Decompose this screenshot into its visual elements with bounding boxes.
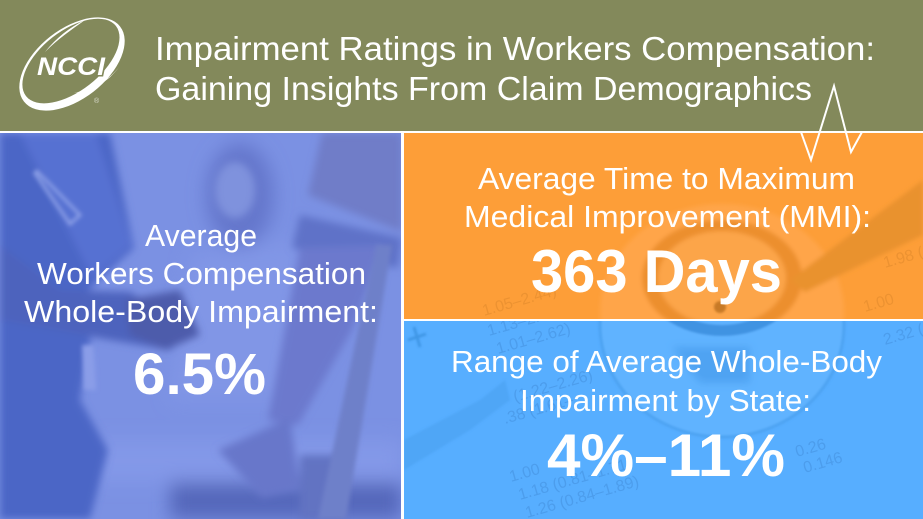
photo: stethoscope and data table, blue tint: 1.13–2.76): [485, 302, 564, 340]
heading: average time to maximum medical improvement: Medical Improvement (MMI):: [464, 199, 871, 234]
heading: average whole-body impairment: Workers Compensation: [37, 256, 366, 291]
photo: stethoscope and data table, orange tint: 1.00: [861, 291, 896, 316]
heading: average whole-body impairment: Whole-Body Impairment:: [24, 294, 378, 329]
photo: stethoscope and data table, orange tint: 1.05–2.44): [480, 282, 559, 320]
photo: stethoscope and data table, blue tint: 1.18 (0.81–1.71): [516, 455, 634, 504]
stat: 4%–11%: 4%–11%: [547, 422, 785, 489]
photo: stethoscope and data table, orange tint: [404, 133, 923, 319]
heading: range of average whole-body impairment by state: Range of Average Whole-Body: [451, 344, 882, 379]
stat: 363 Days: 363 Days: [531, 238, 782, 305]
heading: average whole-body impairment: Average: [145, 218, 257, 253]
photo: stethoscope and data table, blue tint: 0.146: [801, 449, 845, 477]
photo: stethoscope and data table, blue tint: [404, 321, 923, 519]
heading: average time to maximum medical improvement: [464, 161, 871, 234]
icon: NCCI logo: NCCI: [37, 53, 106, 81]
panel: average time to MMI: [404, 133, 923, 319]
heading: average whole-body impairment: [24, 218, 378, 329]
title: Impairment Ratings in Workers Compensation:: [155, 30, 875, 67]
panel: range by state: [404, 321, 923, 519]
panel: header band: [0, 0, 923, 131]
panel: workers compensation whole-body impairment: [0, 133, 402, 519]
photo: nurse and patient on crutches, blue tint: [0, 133, 402, 519]
heading: range of average whole-body impairment by state: Impairment by State:: [520, 383, 811, 418]
icon: NCCI logo: [2, 0, 142, 129]
heading: average time to maximum medical improvement: Average Time to Maximum: [478, 161, 855, 196]
photo: stethoscope and data table, blue tint: (1.22–2.26): [511, 367, 595, 406]
title: [155, 30, 875, 107]
photo: stethoscope and data table, blue tint: 0.26: [793, 436, 828, 461]
photo: stethoscope and data table, blue tint: 1.00: [507, 461, 542, 486]
photo: stethoscope and data table, blue tint: .38 (1.61–: [501, 392, 575, 428]
photo: stethoscope and data table, blue tint: 1.01–2.62): [494, 320, 573, 358]
stat: 6.5%: 6.5%: [133, 342, 266, 407]
heading: range of average whole-body impairment by state: [451, 344, 882, 418]
title: Gaining Insights From Claim Demographics: [155, 70, 812, 107]
icon: NCCI logo: ®: [94, 97, 100, 105]
